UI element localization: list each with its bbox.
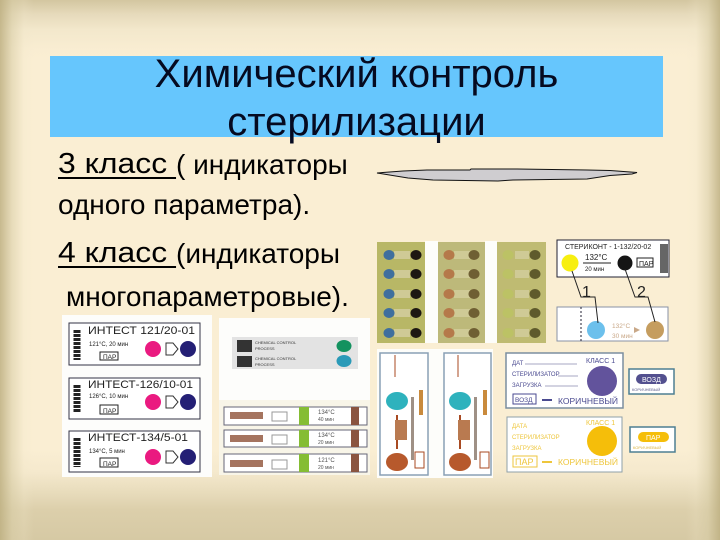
class 4 line 2: многопараметровые). [66,281,349,312]
callout numbers: 2 [637,284,646,301]
class 1 purple label: КОРИЧНЕВЫЙ [558,395,618,406]
intest label 3: ПАР [103,461,116,468]
class 1 purple label: СТЕРИЛИЗАТОР [512,372,560,378]
title line 1: Химический контроль [155,52,558,96]
strip 2 [444,353,491,475]
brown and green strips: 134°C [318,410,335,416]
white backing right [219,318,370,400]
class 4 heading [58,237,340,269]
class 1 purple label: ДАТ [512,361,524,367]
photo: intest labels [62,315,370,477]
intest label 2: ПАР [103,408,116,415]
class 1 yellow label: КОРИЧНЕВЫЙ [558,456,618,467]
intest label 3: 134°C, 5 мин [89,449,125,455]
changed label [557,307,668,341]
intest label 3: ИНТЕСТ-134/5-01 [88,432,188,444]
sterikont label: СТЕРИКОНТ - 1-132/20-02 [565,244,651,251]
title banner [50,56,663,137]
changed label: 132°C [612,322,630,330]
intest label 2: 126°C, 10 мин [89,394,128,400]
brown and green strips: 121°C [318,458,335,464]
class 3 line 2: одного параметра). [58,189,310,220]
indicator strip: class 3 [376,168,638,182]
intest label 1: ИНТЕСТ 121/20-01 [88,325,195,337]
sterikont label [557,240,669,277]
intest label 3 [69,431,200,472]
class 1 yellow label: ПАР [515,457,533,467]
changed label: 30 мин [612,333,633,340]
white backing [377,349,493,478]
class 1 yellow label: ДАТА [512,424,527,430]
olive sheet [497,242,546,343]
intest label 2: ИНТЕСТ-126/10-01 [88,379,193,391]
class 4 heading: 4 класс [58,237,167,269]
small steam tag: ПАР [646,435,661,442]
intest label 1 [69,323,200,365]
class 1 yellow label: КЛАСС 1 [586,420,615,427]
photo: sheets and sterikont labels [377,240,670,343]
class 1 purple label: ЗАГРУЗКА [512,383,542,389]
class 1 yellow label [507,417,622,472]
class 1 purple label: ВОЗД [515,397,533,404]
intest label 1: 121°C, 20 мин [89,342,128,348]
strip 1 [380,353,428,475]
sterikont label: ПАР [639,261,654,268]
text: class 4 [58,237,349,312]
class 4 heading: (индикаторы [176,238,340,269]
sterikont label: 20 мин [585,267,604,273]
class 1 purple label [506,353,623,408]
text: class 3 [58,148,348,220]
blue-black sheet [377,242,425,343]
grey process labels [232,337,358,369]
white backing left [62,315,212,477]
class 3 heading: 3 класс [58,148,167,180]
sterikont label: 132°C [585,253,608,262]
callout numbers: 1 [582,284,591,301]
small air tag: КОРИЧНЕВЫЙ [632,387,660,392]
brown and green strips: 40 мин [318,417,334,423]
photo: long strips and class labels [377,349,676,478]
class 1 yellow label: СТЕРИЛИЗАТОР [512,435,560,441]
class 1 yellow label: ЗАГРУЗКА [512,446,542,452]
intest label 2 [69,378,200,419]
callout lines [572,269,655,323]
intest label 1: ПАР [103,354,116,361]
grey process labels: CHEMICAL CONTROL [255,356,297,361]
small steam tag: КОРИЧНЕВЫЙ [633,445,661,450]
brown and green strips: 20 мин [318,465,334,471]
grey process labels: PROCESS [255,362,275,367]
small air tag [629,369,674,394]
class 1 purple label: КЛАСС 1 [586,358,615,365]
grey process labels: CHEMICAL CONTROL [255,340,297,345]
brown sheet [438,242,485,343]
brown and green strips: 20 мин [318,440,334,446]
callout numbers [582,284,646,301]
small air tag: ВОЗД [642,377,661,384]
brown and green strips [224,407,367,472]
brown and green strips: 134°C [318,433,335,439]
grey process labels: PROCESS [255,346,275,351]
class 3 heading [58,148,348,180]
small steam tag [630,427,675,452]
title line 2: стерилизации [227,100,486,144]
class 3 heading: ( индикаторы [176,149,348,180]
white gaps [425,241,438,343]
